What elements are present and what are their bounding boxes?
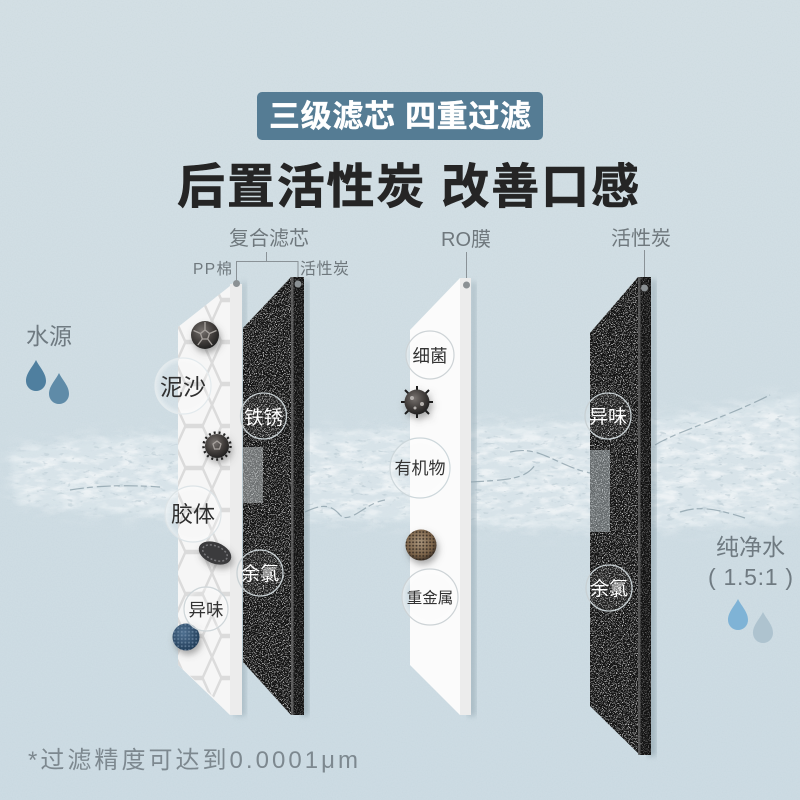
bubble: odor on carbon xyxy=(585,393,631,439)
bubble: chlorine on carbon xyxy=(586,565,632,611)
title badge xyxy=(257,92,543,140)
bubble: heavy metals: 重金属 xyxy=(407,589,453,607)
label: composite filter with bracket: 复合滤芯 xyxy=(229,227,309,250)
panel: PP cotton filter xyxy=(178,280,246,716)
footnote: *过滤精度可达到0.0001μm xyxy=(28,747,358,774)
title badge: 三级滤芯 四重过滤 xyxy=(269,99,531,134)
bubble: residual chlorine: 余氯 xyxy=(241,563,279,585)
panel: RO membrane filter xyxy=(410,278,476,716)
bubble: organic matter: 有机物 xyxy=(394,459,446,478)
bubble: odor on PP cotton xyxy=(184,587,228,631)
bubble: mud and sand: 泥沙 xyxy=(160,374,206,400)
bubble: bacteria xyxy=(406,331,454,379)
label: water source: 水源 xyxy=(26,323,72,349)
icon: source water drops xyxy=(26,360,69,404)
label: RO membrane: RO膜 xyxy=(441,228,491,251)
bubble: colloid: 胶体 xyxy=(171,502,215,527)
particle: brown ball xyxy=(406,530,436,560)
label: activated carbon xyxy=(611,227,671,288)
label: pure water ratio xyxy=(708,534,793,590)
label: composite filter with bracket: 活性炭 xyxy=(300,260,349,278)
bubble: rust: 铁锈 xyxy=(244,407,283,429)
label: composite filter with bracket: PP棉 xyxy=(193,260,232,278)
icon: pure water drops xyxy=(728,599,773,643)
bubble: organic matter xyxy=(390,438,450,498)
bubble: rust xyxy=(240,393,286,439)
bubble: colloid xyxy=(165,486,221,542)
label: RO membrane xyxy=(441,228,491,285)
label: activated carbon: 活性炭 xyxy=(611,227,671,250)
particle: gray round ball xyxy=(191,321,219,349)
label: pure water ratio: 纯净水 xyxy=(716,534,785,560)
main heading: 后置活性炭 改善口感 xyxy=(177,161,639,214)
bubble: residual chlorine xyxy=(237,550,283,596)
panel: composite carbon filter xyxy=(243,277,309,716)
particle: spiky ball xyxy=(204,432,230,460)
label: pure water ratio: ( 1.5:1 ) xyxy=(708,564,793,590)
bubble: odor on PP cotton: 异味 xyxy=(188,600,224,620)
bubble: bacteria: 细菌 xyxy=(412,346,448,366)
bubble: chlorine on carbon: 余氯 xyxy=(590,578,628,600)
bubble: mud and sand xyxy=(155,358,211,414)
label: composite filter with bracket xyxy=(193,227,349,283)
water stream xyxy=(10,394,800,528)
particle: spiky bacterium xyxy=(401,386,433,418)
bubble: odor on carbon: 异味 xyxy=(589,406,627,428)
particle: dark oval xyxy=(195,537,235,569)
panel: activated carbon filter xyxy=(590,277,656,756)
bubble: heavy metals xyxy=(402,569,458,625)
particle: blue ball xyxy=(172,624,200,650)
